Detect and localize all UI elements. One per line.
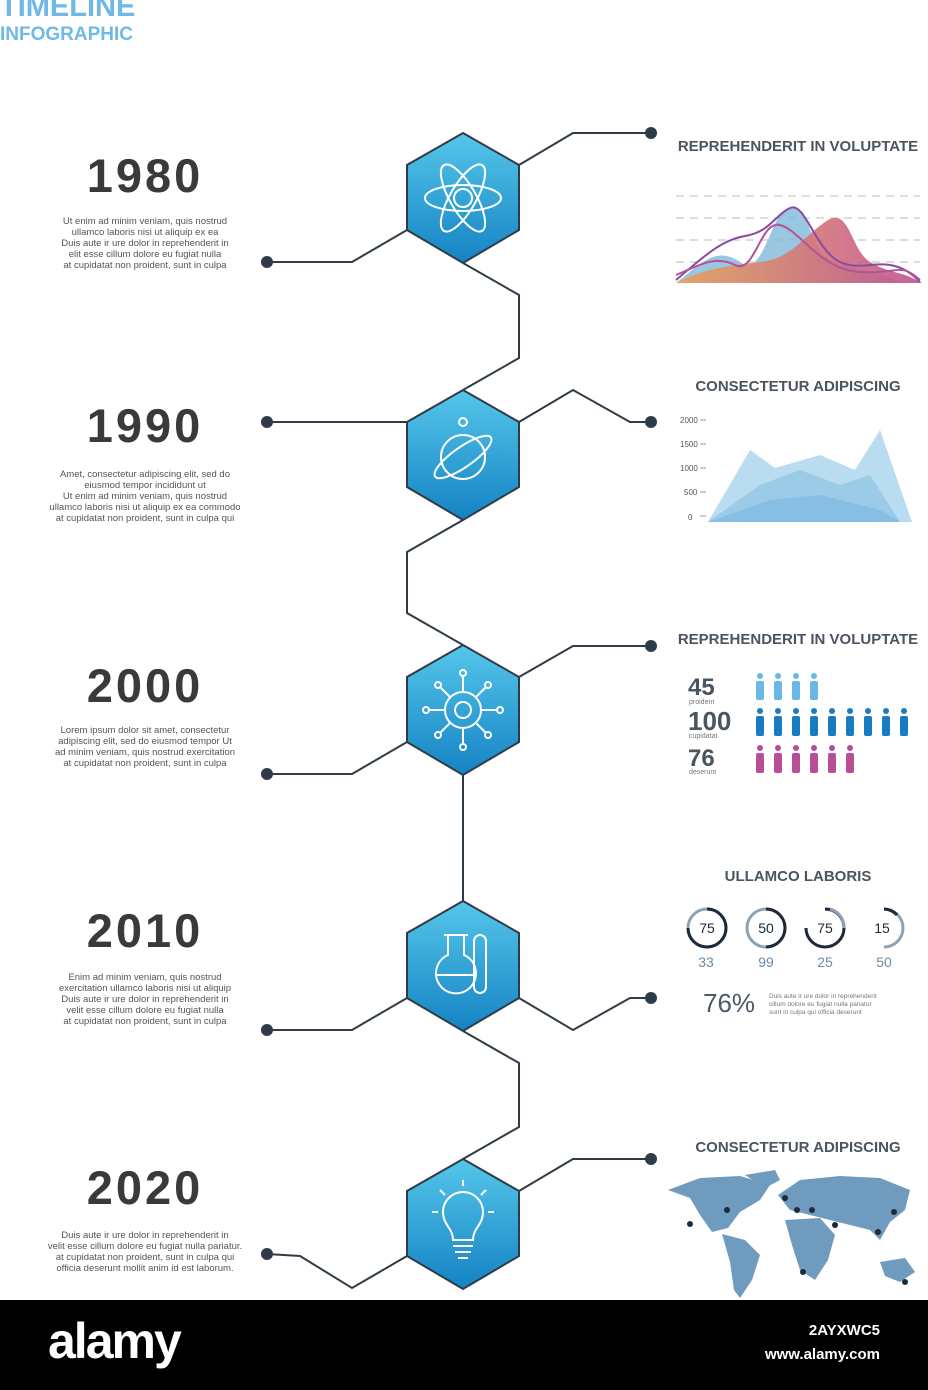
- timeline graphic: 25: [817, 954, 833, 970]
- chart 1 area: [676, 196, 922, 283]
- chart 3 people: cupidatat: [689, 733, 717, 740]
- text 2020: officia deserunt mollit anim id est laborum.: [56, 1263, 234, 1274]
- text 2020: velit esse cillum dolore eu fugiat nulla pariatur.: [48, 1241, 242, 1252]
- title: [0, 0, 135, 45]
- text 1990: ullamco laboris nisi ut aliquip ex ea commodo: [49, 502, 241, 513]
- chart 3 people: 100: [688, 706, 731, 736]
- text 1990: [49, 469, 241, 524]
- chart 3 people: [688, 673, 908, 776]
- chart 2 mountains: [680, 416, 912, 522]
- text 2000: at cupidatat non proident, sunt in culpa: [63, 758, 227, 769]
- heading: chart 4: ULLAMCO LABORIS: [725, 868, 871, 885]
- hexagon 1 atom: [407, 133, 519, 263]
- text 1980: elit esse cillum dolore eu fugiat nulla: [69, 249, 221, 260]
- text 1990: Amet, consectetur adipiscing elit, sed do: [60, 469, 230, 480]
- footer bar: [0, 1300, 928, 1390]
- footer bar: 2AYXWC5: [809, 1322, 880, 1339]
- timeline graphic: 15: [874, 920, 890, 936]
- title: INFOGRAPHIC: [0, 24, 133, 45]
- text 2010: at cupidatat non proident, sunt in culpa: [63, 1016, 227, 1027]
- 1980: 1980: [87, 149, 203, 202]
- timeline graphic: 50: [758, 920, 774, 936]
- timeline graphic: sunt in culpa qui officia deserunt: [769, 1009, 862, 1016]
- timeline graphic: 50: [876, 954, 892, 970]
- chart 4 donuts: [688, 909, 903, 947]
- text 2000: Lorem ipsum dolor sit amet, consectetur: [61, 725, 229, 736]
- text 2000: ad minim veniam, quis nostrud exercitation: [55, 747, 235, 758]
- chart 3 people: 76: [688, 745, 715, 772]
- hexagon 4 flasks: [407, 901, 519, 1031]
- heading: chart 2: CONSECTETUR ADIPISCING: [695, 378, 901, 395]
- chart 2 mountains: 500: [684, 488, 698, 497]
- heading: chart 3: REPREHENDERIT IN VOLUPTATE: [678, 631, 918, 648]
- hexagon 5 bulb: [407, 1159, 519, 1289]
- timeline graphic: Duis aute ir ure dolor in reprehenderit: [769, 993, 877, 1000]
- footer bar: alamy: [48, 1313, 180, 1369]
- 2020: 2020: [87, 1161, 203, 1214]
- chart 2 mountains: 2000: [680, 416, 698, 425]
- text 2020: Duis aute ir ure dolor in reprehenderit in: [61, 1230, 229, 1241]
- text 2000: [55, 725, 235, 769]
- text 1990: Ut enim ad minim veniam, quis nostrud: [63, 491, 227, 502]
- text 2020: at cupidatat non proident, sunt in culpa qui: [56, 1252, 234, 1263]
- text 2020: [48, 1230, 242, 1274]
- footer bar: www.alamy.com: [765, 1346, 880, 1363]
- chart 2 mountains: 0: [688, 513, 693, 522]
- chart 2 mountains: 1000: [680, 464, 698, 473]
- chart 3 people: 45: [688, 674, 715, 701]
- timeline graphic: cillum dolore eu fugiat nulla pariatur: [769, 1001, 872, 1008]
- heading: map: CONSECTETUR ADIPISCING: [695, 1139, 901, 1156]
- chart 2 mountains: 1500: [680, 440, 698, 449]
- 2010: 2010: [87, 904, 203, 957]
- world map: [668, 1170, 915, 1298]
- 2000: 2000: [87, 659, 203, 712]
- hexagon 3 virus: [407, 645, 519, 775]
- chart 3 people: proident: [689, 699, 714, 706]
- text 2000: adipiscing elit, sed do eiusmod tempor Ut: [58, 736, 232, 747]
- chart 3 people: deserunt: [689, 769, 716, 776]
- text 1990: at cupidatat non proident, sunt in culpa qui: [56, 513, 234, 524]
- text 2010: Enim ad minim veniam, quis nostrud: [68, 972, 222, 983]
- timeline graphic: 75: [817, 920, 833, 936]
- text 1980: Ut enim ad minim veniam, quis nostrud: [63, 216, 227, 227]
- timeline graphic: 99: [758, 954, 774, 970]
- text 2010: Duis aute ir ure dolor in reprehenderit in: [61, 994, 229, 1005]
- timeline graphic: 75: [699, 920, 715, 936]
- text 2010: exercitation ullamco laboris nisi ut aliquip: [59, 983, 231, 994]
- text 2010: velit esse cillum dolore eu fugiat nulla: [66, 1005, 224, 1016]
- heading: chart 1: REPREHENDERIT IN VOLUPTATE: [678, 138, 918, 155]
- text 2010: [59, 972, 231, 1027]
- text 1980: at cupidatat non proident, sunt in culpa: [63, 260, 227, 271]
- timeline graphic: 33: [698, 954, 714, 970]
- text 1990: eiusmod tempor incididunt ut: [84, 480, 206, 491]
- hexagon 2 planet: [407, 390, 519, 520]
- text 1980: Duis aute ir ure dolor in reprehenderit in: [61, 238, 229, 249]
- text 1980: ullamco laboris nisi ut aliquip ex ea: [72, 227, 218, 238]
- 1990: 1990: [87, 399, 203, 452]
- timeline graphic: 76%: [703, 988, 755, 1018]
- text 1980: [61, 216, 229, 271]
